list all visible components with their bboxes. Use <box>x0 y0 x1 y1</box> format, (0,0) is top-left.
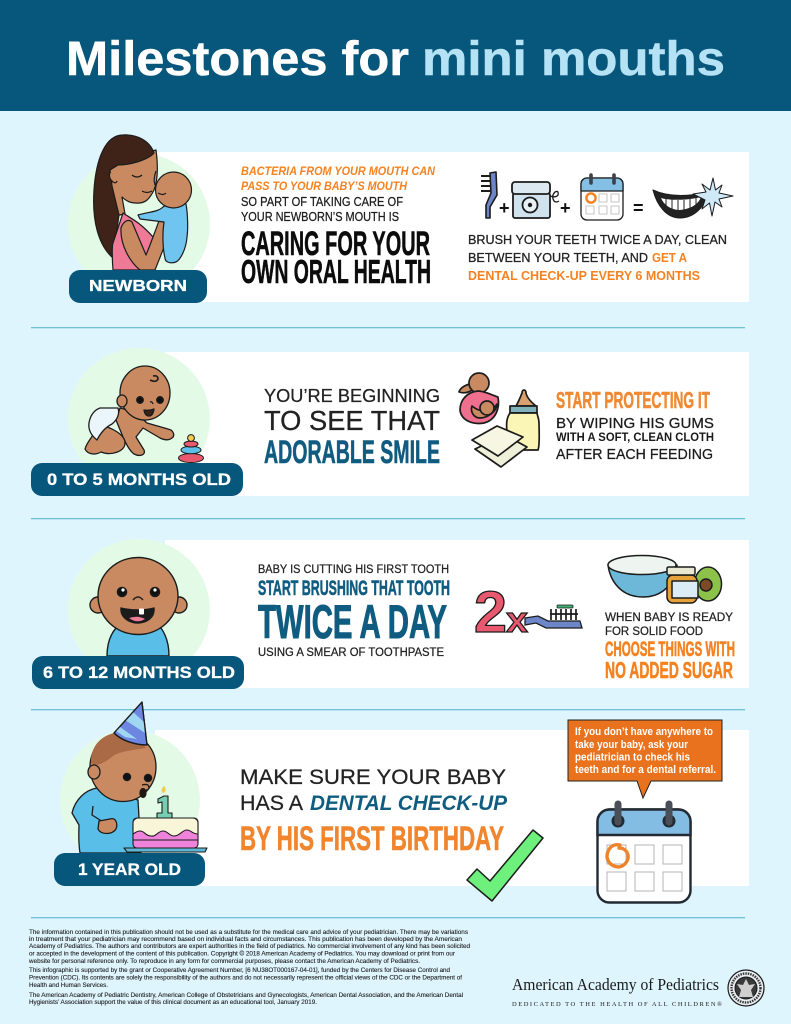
panel: 0 to 5 months <box>31 348 749 496</box>
illustration: crawling baby <box>85 366 174 455</box>
text: solid food advice: FOR SOLID FOOD <box>605 624 703 638</box>
text: dental check-up by first birthday: BY HIS FIRST BIRTHDAY <box>240 820 504 858</box>
badge: 0 to 5 months old <box>31 463 243 496</box>
text block: legal disclaimer: This infographic is supported by the grant or Cooperative Agreement Number, [6 NU38OT000167-04-01], funded by the Centers for Disease Control and <box>29 967 450 974</box>
text: brushing and check-up advice <box>468 233 727 283</box>
panel: 1 year old <box>54 702 749 902</box>
icons: brush plus floss plus check-up equals healthy smile <box>481 172 733 220</box>
illustration: mother holding newborn <box>94 135 192 270</box>
title banner: mini mouths <box>422 33 725 86</box>
text: adorable smile: TO SEE THAT <box>264 405 440 436</box>
text block: legal disclaimer: Academy of Pediatrics. The authors and contributors are expert authorities in the field of pediatrics. No commercial involvement of any kind has been solicited <box>29 943 470 950</box>
text: dental check-up by first birthday: MAKE SURE YOUR BABY <box>240 766 506 789</box>
callout: pediatrician referral: pediatrician to check his <box>575 752 690 764</box>
text: dental check-up by first birthday <box>240 766 508 858</box>
text: adorable smile <box>264 386 440 470</box>
text block: legal disclaimer: The information contained in this publication should not be used as a substitute for the medical care and advice of your pediatrician. There may be variations <box>29 929 468 936</box>
text: brushing and check-up advice: GET A <box>652 251 687 265</box>
panel: newborn <box>68 135 749 303</box>
icons: brush plus floss plus check-up equals healthy smile: = <box>633 198 644 218</box>
text: start protecting it: AFTER EACH FEEDING <box>556 447 713 463</box>
icon: toothbrush twice: 2 <box>474 580 507 645</box>
text: caring for your own oral health: BACTERIA FROM YOUR MOUTH CAN <box>241 164 436 178</box>
text: caring for your own oral health: OWN ORAL HEALTH <box>241 253 431 290</box>
text: caring for your own oral health <box>241 164 436 290</box>
callout: pediatrician referral <box>568 720 722 798</box>
badge: 1 year old: 1 YEAR OLD <box>78 860 181 879</box>
panel: 6 to 12 months <box>32 539 749 689</box>
icons: brush plus floss plus check-up equals healthy smile: + <box>499 198 510 218</box>
text: brushing and check-up advice: BRUSH YOUR TEETH TWICE A DAY, CLEAN <box>468 233 727 247</box>
text block: legal disclaimer <box>28 929 470 1006</box>
icon: bowl, jar and avocado <box>608 556 722 603</box>
text: brushing and check-up advice: DENTAL CHECK-UP EVERY 6 MONTHS <box>468 269 700 283</box>
icons: brush plus floss plus check-up equals healthy smile: + <box>560 198 571 218</box>
text: caring for your own oral health: YOUR NEWBORN’S MOUTH IS <box>241 210 399 224</box>
text: adorable smile: YOU’RE BEGINNING <box>264 386 440 406</box>
icon: calendar <box>598 804 690 902</box>
callout: pediatrician referral: If you don’t have anywhere to <box>575 726 713 738</box>
badge: 6 to 12 months old <box>32 656 244 689</box>
text: adorable smile: ADORABLE SMILE <box>264 434 440 470</box>
text block: legal disclaimer: Prevention (CDC). Its contents are solely the responsibility of the authors and do not necessarily represent the official views of the CDC or the Department of <box>29 974 462 982</box>
icon: stacking ring toy <box>178 435 204 462</box>
text: dental check-up by first birthday: HAS A <box>240 792 303 815</box>
callout: pediatrician referral: take your baby, ask your <box>575 739 689 751</box>
title banner <box>0 0 791 111</box>
text: twice a day: USING A SMEAR OF TOOTHPASTE <box>258 645 444 659</box>
text: start protecting it <box>556 387 714 463</box>
text: caring for your own oral health: CARING FOR YOUR <box>241 225 430 263</box>
icon: nursing mother, bottle and cloths <box>459 373 539 467</box>
text: dental check-up by first birthday: DENTAL CHECK-UP <box>310 792 508 815</box>
text: solid food advice: WHEN BABY IS READY <box>605 610 733 624</box>
text block: legal disclaimer: Hygienists’ Association support the value of this clinical document as an educational tool, January 2019. <box>29 999 317 1006</box>
icon: toothbrush twice <box>474 580 582 645</box>
callout: pediatrician referral: teeth and for a dental referral. <box>575 764 716 776</box>
logo: seal <box>728 970 764 1006</box>
text: caring for your own oral health: PASS TO YOUR BABY’S MOUTH <box>241 179 408 193</box>
text: twice a day: START BRUSHING THAT TOOTH <box>258 577 450 600</box>
badge: 0 to 5 months old: 0 TO 5 MONTHS OLD <box>47 470 231 489</box>
logo: American Academy of Pediatrics: DEDICATED TO THE HEALTH OF ALL CHILDREN® <box>512 1001 722 1008</box>
badge: 1 year old <box>54 853 205 886</box>
text block: legal disclaimer: in treatment that your pediatrician may recommend based on individual facts and circumstances. This publication has been developed by the American <box>29 936 462 943</box>
logo: American Academy of Pediatrics: American Academy of Pediatrics <box>512 975 719 994</box>
text block: legal disclaimer: website for personal reference only. To reproduce in any form for commercial purposes, please contact the American Academy of Pediatrics. <box>28 958 420 965</box>
badge: newborn: NEWBORN <box>89 278 187 295</box>
icon: green check mark <box>467 830 543 901</box>
text: twice a day: BABY IS CUTTING HIS FIRST TOOTH <box>258 562 449 576</box>
text block: legal disclaimer: or accepted in the development of the content of this publication. Copyright © 2018 American Academy of Pediatrics. You may download or print from our <box>29 950 455 958</box>
title banner: Milestones for <box>66 33 409 86</box>
text: twice a day <box>258 562 450 659</box>
text: solid food advice <box>605 610 735 683</box>
badge: 6 to 12 months old: 6 TO 12 MONTHS OLD <box>43 663 235 682</box>
text block: legal disclaimer: Health and Human Services. <box>29 982 108 989</box>
illustration: birthday cake <box>124 786 207 852</box>
text: start protecting it: BY WIPING HIS GUMS <box>556 416 714 432</box>
text block: legal disclaimer: The American Academy of Pediatric Dentistry, American College of Obstetricians and Gynecologists, American Dental Association, and the American Dental <box>29 992 463 999</box>
text: caring for your own oral health: SO PART OF TAKING CARE OF <box>241 195 403 209</box>
badge: newborn <box>69 270 207 303</box>
illustration: baby blowing out birthday candle <box>72 702 156 853</box>
logo: American Academy of Pediatrics <box>512 970 764 1008</box>
illustration: smiling baby with first tooth <box>90 558 187 656</box>
text: start protecting it: WITH A SOFT, CLEAN CLOTH <box>556 430 714 444</box>
text: twice a day: TWICE A DAY <box>258 595 447 648</box>
text: brushing and check-up advice: BETWEEN YOUR TEETH, AND <box>468 251 648 265</box>
icon: toothbrush twice: x <box>506 599 528 640</box>
